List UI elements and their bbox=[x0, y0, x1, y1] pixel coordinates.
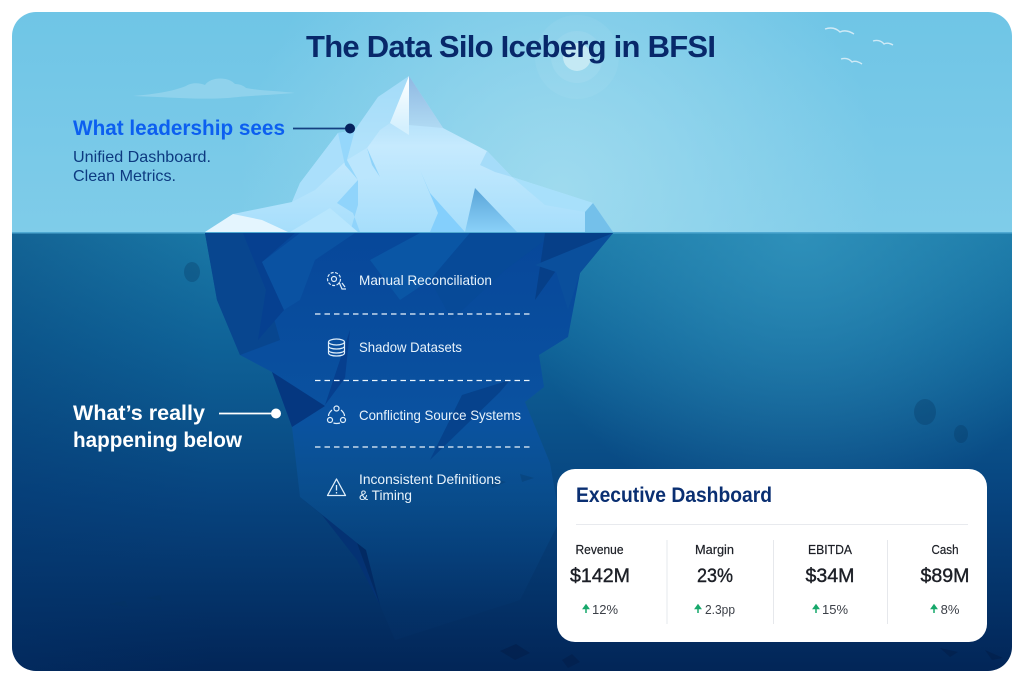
metric: ebitda: 15% bbox=[822, 602, 848, 617]
metric: ebitda bbox=[806, 543, 854, 617]
dashboard heading: Executive Dashboard bbox=[576, 484, 772, 507]
item: manual reconciliation: Manual Reconciliation bbox=[359, 272, 492, 288]
peak faces bbox=[390, 76, 409, 135]
metric: cash bbox=[920, 543, 970, 617]
icon: conflicting cycle bbox=[328, 406, 346, 424]
metric: revenue: Revenue bbox=[576, 543, 624, 557]
cloud bbox=[133, 78, 295, 99]
metric: revenue: $142M bbox=[570, 565, 630, 587]
metric: margin: 23% bbox=[697, 565, 733, 587]
metric: cash: Cash bbox=[932, 543, 959, 557]
sun bbox=[551, 31, 602, 83]
item: inconsistent definitions: Inconsistent Definitions bbox=[359, 471, 501, 487]
iceberg above water bbox=[205, 76, 613, 232]
callout: what's really happening below: What’s really bbox=[73, 401, 205, 425]
callout: what's really happening below bbox=[73, 401, 281, 452]
callout: what's really happening below: happening below bbox=[73, 428, 242, 452]
birds bbox=[825, 28, 893, 64]
metric: revenue bbox=[570, 543, 630, 617]
metric: ebitda: $34M bbox=[806, 565, 854, 587]
callout: what leadership sees bbox=[73, 116, 355, 185]
metric: ebitda: EBITDA bbox=[808, 543, 853, 557]
waterline bbox=[12, 232, 1012, 234]
water bbox=[12, 232, 1012, 672]
callout: what leadership sees: Clean Metrics. bbox=[73, 168, 176, 185]
fish and sea life silhouettes bbox=[184, 262, 968, 488]
callout: what leadership sees: Unified Dashboard. bbox=[73, 149, 211, 166]
metric: cash: $89M bbox=[920, 565, 970, 587]
item: conflicting source systems: Conflicting Source Systems bbox=[359, 407, 521, 423]
dark fish near bottom bbox=[500, 644, 1003, 668]
title: The Data Silo Iceberg in BFSI bbox=[306, 29, 716, 64]
item: shadow datasets: Shadow Datasets bbox=[359, 339, 462, 355]
metric: margin bbox=[695, 543, 735, 617]
iceberg below water bbox=[205, 233, 613, 640]
metric: cash: 8% bbox=[941, 602, 960, 617]
icon: gear with hand bbox=[328, 272, 346, 289]
list: hidden problems: & Timing bbox=[359, 487, 412, 503]
metric: margin: 2.3pp bbox=[705, 602, 735, 617]
callout: what leadership sees: What leadership sees bbox=[73, 116, 285, 140]
icon: warning triangle bbox=[328, 479, 346, 496]
list: hidden problems bbox=[315, 272, 531, 503]
metric: margin: Margin bbox=[695, 543, 734, 557]
left face bbox=[347, 76, 409, 160]
panel: executive dashboard bbox=[557, 469, 987, 642]
icon: database bbox=[328, 339, 344, 356]
sky bbox=[12, 12, 1012, 233]
metric: revenue: 12% bbox=[592, 602, 618, 617]
